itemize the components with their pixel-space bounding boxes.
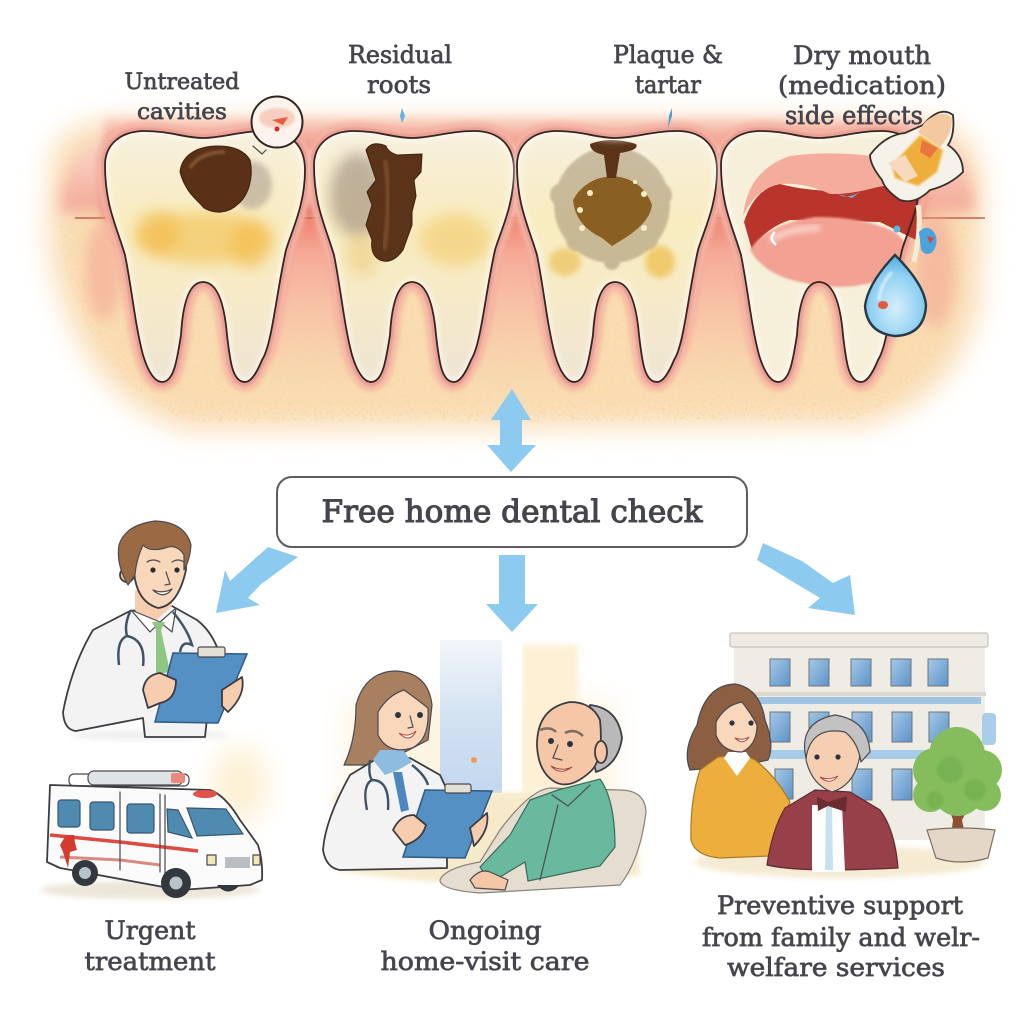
senior man hair bbox=[805, 715, 870, 762]
female doctor features bbox=[395, 712, 423, 738]
label: untreated cavities bbox=[124, 70, 240, 125]
label: plaque and tartar: tartar bbox=[635, 71, 701, 99]
doctor hair bbox=[118, 521, 191, 585]
illustration: ambulance bbox=[40, 747, 268, 899]
icon: small drip at gum top bbox=[400, 108, 405, 123]
gum line bbox=[75, 217, 985, 219]
illustration: potted tree bbox=[913, 727, 1002, 862]
clipboard bbox=[403, 784, 492, 858]
label: plaque and tartar: Plaque & bbox=[613, 41, 723, 69]
label: preventive support: Preventive support bbox=[717, 891, 963, 920]
arrow: to urgent treatment bbox=[216, 547, 298, 613]
stethoscope bbox=[118, 612, 192, 666]
room background bbox=[335, 640, 640, 884]
patient face bbox=[537, 702, 601, 784]
tooth 4: dry mouth bbox=[721, 131, 921, 382]
sand coloured jaw bone bbox=[48, 122, 982, 430]
senior man features bbox=[814, 754, 841, 781]
icon: medication tooth badge bbox=[870, 112, 963, 201]
label: untreated cavities: cavities bbox=[137, 100, 227, 125]
label: residual roots: Residual bbox=[348, 41, 452, 69]
ambulance door lines and bumper bbox=[120, 792, 260, 875]
stethoscope bbox=[365, 760, 428, 810]
left and right pink gum fade bbox=[86, 212, 955, 328]
building windows bbox=[770, 659, 949, 800]
arrow: two-way from teeth to check bbox=[487, 389, 536, 472]
ambulance windows bbox=[58, 800, 243, 838]
outer soft gum band bbox=[60, 128, 975, 212]
arrow: to ongoing care bbox=[486, 555, 538, 632]
tooth 1: untreated cavity bbox=[105, 131, 305, 382]
woman jacket bbox=[691, 755, 790, 858]
tooth 2: residual root bbox=[314, 131, 514, 382]
panel: teeth and gums cross-section bbox=[48, 96, 985, 430]
gum papillae between teeth bbox=[268, 219, 758, 395]
label: residual roots bbox=[348, 41, 452, 99]
icon: saliva strand and small droplets bbox=[894, 205, 937, 262]
chair bbox=[440, 788, 646, 893]
icon: small drip at gum top bbox=[668, 108, 672, 128]
illustration: female doctor bbox=[323, 671, 492, 870]
label: dry mouth: Dry mouth bbox=[793, 41, 931, 70]
doctor neck bbox=[135, 590, 172, 626]
icon: magnifier inset over cavity bbox=[252, 96, 302, 154]
label: urgent treatment: treatment bbox=[84, 947, 216, 976]
senior man bow tie bbox=[817, 796, 847, 812]
roof bar bbox=[69, 771, 189, 786]
illustration: family member bbox=[687, 684, 898, 872]
panel: preventive support bbox=[687, 633, 1002, 982]
gum outlines around teeth bbox=[105, 131, 921, 382]
senior man jacket bbox=[767, 790, 898, 870]
red gum rims bbox=[105, 131, 921, 382]
sand speckle texture bbox=[60, 225, 970, 422]
patient shirt bbox=[480, 779, 615, 883]
floor shadow bbox=[695, 846, 985, 878]
doctor tie bbox=[152, 622, 170, 674]
label: dry mouth: side effects bbox=[785, 101, 923, 130]
label: residual roots: roots bbox=[367, 71, 431, 99]
female doctor hands bbox=[393, 813, 487, 846]
label: urgent treatment bbox=[84, 916, 216, 976]
label: ongoing home-visit care: Ongoing bbox=[428, 916, 542, 945]
illustration: welfare building bbox=[730, 633, 996, 840]
doctor ear bbox=[120, 568, 134, 582]
woman hair bbox=[687, 684, 771, 770]
label: preventive support bbox=[702, 891, 980, 982]
female doctor hair back bbox=[344, 671, 432, 765]
clipboard bbox=[155, 647, 247, 723]
label: urgent treatment: Urgent bbox=[104, 916, 196, 945]
doctor collar bbox=[131, 608, 176, 632]
doctor coat bbox=[63, 606, 217, 737]
ambulance red stripes and cross bbox=[50, 790, 217, 868]
doctor features bbox=[147, 560, 184, 595]
doctor hands bbox=[143, 673, 243, 712]
tooth 3: plaque and tartar bbox=[517, 131, 717, 382]
dry mouth interior bbox=[743, 150, 918, 287]
panel: urgent treatment bbox=[40, 521, 268, 976]
issue labels bbox=[124, 41, 946, 130]
senior man face bbox=[806, 728, 860, 792]
label: ongoing home-visit care bbox=[380, 916, 590, 976]
ambulance wheels bbox=[72, 860, 240, 898]
icon: water drop bbox=[865, 255, 926, 336]
female doctor face bbox=[378, 690, 428, 750]
female doctor coat bbox=[323, 758, 447, 870]
patient features bbox=[540, 728, 607, 771]
arrow: to preventive support bbox=[757, 543, 855, 615]
woman face bbox=[716, 702, 757, 752]
woman features bbox=[729, 720, 754, 742]
upper gum band bbox=[104, 118, 922, 218]
label: dry mouth: (medication) bbox=[778, 71, 946, 100]
panel: ongoing home-visit care bbox=[323, 640, 646, 976]
heading box: free home dental check: Free home dental check bbox=[322, 494, 703, 530]
ambulance body bbox=[47, 785, 262, 890]
label: plaque and tartar bbox=[613, 41, 723, 99]
patient hands bbox=[470, 871, 508, 890]
label: ongoing home-visit care: home-visit care bbox=[380, 947, 590, 976]
illustration: male doctor with clipboard bbox=[63, 521, 247, 740]
label: untreated cavities: Untreated bbox=[124, 70, 240, 95]
heading box: free home dental check bbox=[277, 477, 747, 547]
label: dry mouth bbox=[778, 41, 946, 130]
label: preventive support: from family and welr- bbox=[702, 923, 980, 952]
label: preventive support: welfare services bbox=[727, 953, 945, 982]
doctor face bbox=[134, 540, 186, 608]
illustration: elderly patient in chair bbox=[440, 702, 646, 893]
patient hair bbox=[590, 705, 622, 772]
